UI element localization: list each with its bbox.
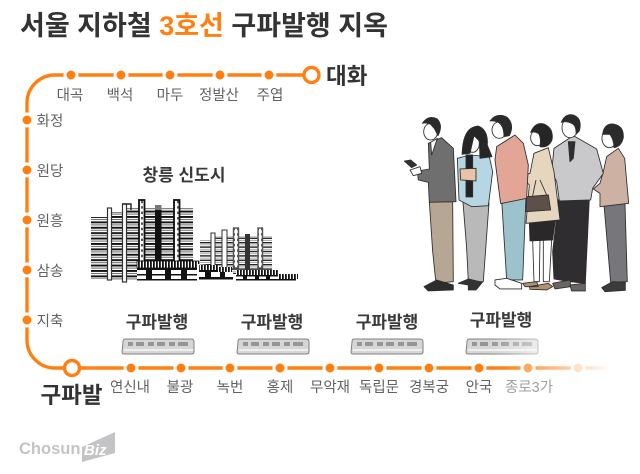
logo: ChosunBiz: Biz — [84, 442, 107, 459]
left station labels: 지축 — [37, 313, 63, 330]
icon: train — [351, 339, 423, 354]
left stations — [21, 114, 33, 326]
bottom station labels: 종로3가 — [505, 379, 553, 396]
terminal: Gupabal: 구파발 — [40, 383, 103, 408]
departure group 1: label and train: 구파발행 — [126, 313, 188, 332]
top station labels — [57, 87, 283, 104]
terminal: Gupabal — [40, 360, 103, 408]
top station labels: 백석 — [107, 87, 133, 104]
bottom station labels: 독립문 — [359, 379, 399, 396]
departure group 2: label and train — [237, 313, 309, 354]
left station labels: 원당 — [37, 163, 63, 180]
left station labels: 화정 — [37, 113, 63, 130]
left station labels — [37, 113, 63, 330]
icon: train — [466, 337, 540, 356]
departure group 1: label and train — [122, 313, 194, 354]
large apartment complex — [91, 200, 200, 282]
top station labels: 주엽 — [257, 87, 283, 104]
terminal: Daehwa: 대화 — [326, 64, 368, 89]
logo: ChosunBiz: Chosun — [19, 440, 80, 458]
bottom station labels: 연신내 — [110, 379, 150, 396]
bottom station labels: 불광 — [167, 379, 193, 396]
bottom station labels — [110, 379, 553, 396]
small apartment complex — [197, 228, 298, 281]
left station labels: 삼송 — [37, 263, 63, 280]
departure group 4: label and train: 구파발행 — [470, 311, 532, 330]
illustration: apartment buildings — [91, 200, 298, 282]
bottom station labels: 홍제 — [267, 379, 293, 396]
bottom station labels: 무악재 — [310, 379, 350, 396]
illustration: crowd of six commuters in line — [404, 115, 629, 292]
subway line 3 route — [27, 75, 612, 368]
bottom station labels: 녹번 — [217, 379, 243, 396]
person 6 — [593, 124, 629, 292]
bottom station labels: 경복궁 — [409, 379, 449, 396]
icon: train — [237, 339, 309, 354]
person 4 — [522, 124, 560, 290]
departure group 2: label and train: 구파발행 — [241, 313, 303, 332]
person 5 — [552, 115, 603, 291]
departure group 3: label and train: 구파발행 — [356, 313, 418, 332]
top station labels: 정발산 — [199, 87, 239, 104]
faded end of the line — [500, 366, 612, 370]
person 2 — [457, 126, 493, 290]
title: 서울 지하철 3호선 구파발행 지옥 — [20, 11, 388, 41]
person 1 — [404, 117, 456, 291]
left station labels: 원흥 — [37, 212, 63, 230]
heading: Changneung new town: 창릉 신도시 — [143, 166, 225, 185]
top station labels: 마두 — [157, 87, 183, 104]
top stations — [65, 69, 275, 81]
logo: ChosunBiz — [19, 432, 115, 462]
bottom station labels: 안국 — [466, 379, 492, 396]
icon: train — [122, 339, 194, 354]
bottom stations — [125, 362, 584, 374]
terminal: Daehwa — [304, 64, 368, 89]
top station labels: 대곡 — [57, 87, 83, 104]
person 3 — [490, 115, 528, 289]
departure group 3: label and train — [351, 313, 423, 354]
departure group 4: label and train — [466, 311, 540, 356]
